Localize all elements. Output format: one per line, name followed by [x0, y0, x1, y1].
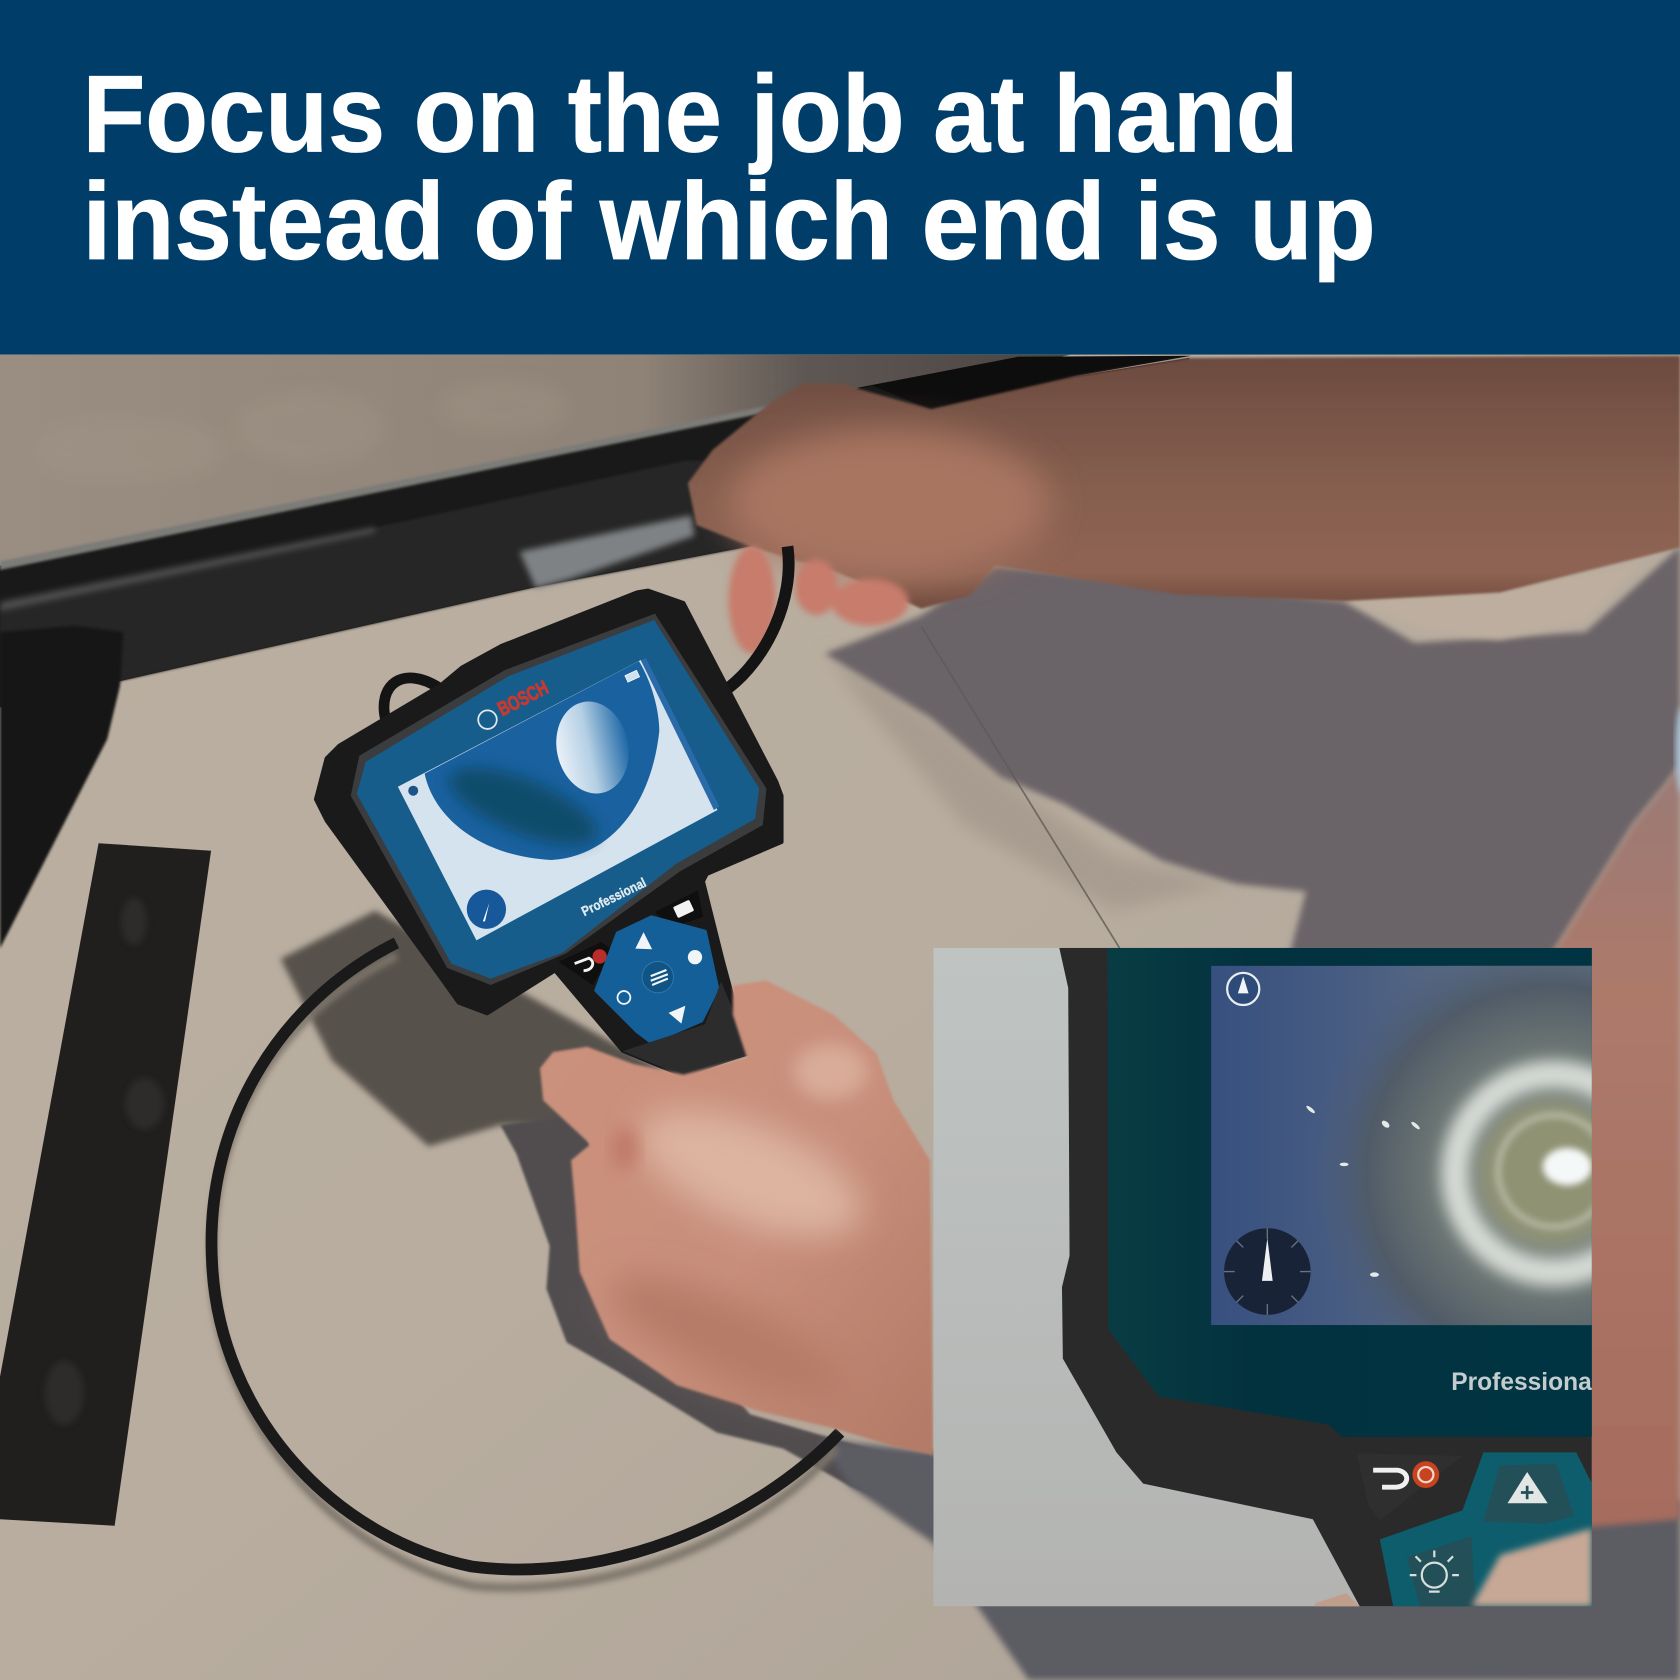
back arrow: [575, 958, 593, 971]
cable shadow: [212, 956, 836, 1588]
main right shadow: [825, 546, 1680, 954]
channel lower face: [0, 461, 750, 707]
battery icon: [625, 670, 640, 682]
right screen band: [641, 658, 719, 810]
dark halo: [1304, 923, 1680, 1423]
lighter wrist of upper arm: [729, 429, 1050, 579]
compass needle: [1262, 1238, 1273, 1281]
thumb in inset: [1471, 1528, 1592, 1606]
white core: [1543, 1148, 1592, 1185]
compass needle: [483, 903, 489, 921]
black ledge above arm: [857, 356, 1191, 411]
zoomed inset: [933, 923, 1680, 1606]
bright button: [688, 950, 702, 964]
olive core: [1480, 1102, 1623, 1245]
lower dark floor shadow: [820, 1439, 1680, 1680]
inset background: [933, 948, 1592, 1606]
finger tip in inset: [1315, 1593, 1360, 1606]
sunlit floor patch: [1468, 629, 1540, 643]
compass ticks: [1224, 1228, 1311, 1315]
black strip: [0, 843, 211, 1526]
dark interior band: [440, 752, 606, 861]
tile seam: [921, 627, 1120, 948]
camera glyph: [673, 900, 694, 918]
title line 2: instead of which end is up: [82, 161, 1376, 283]
inner pale ring: [1498, 1115, 1610, 1227]
up triangle: [1508, 1472, 1548, 1503]
teal keypad: [1380, 1452, 1592, 1606]
photo scene: [0, 355, 1680, 1680]
camera button: [655, 890, 703, 928]
cable in upper hand: [729, 546, 789, 688]
wall lip highlight: [0, 405, 771, 570]
white specks: [1305, 1105, 1421, 1277]
strip scuffs: [45, 898, 164, 1425]
device shadow: [281, 911, 664, 1146]
Professional label: Professional: [1451, 1369, 1599, 1396]
blurred foreground person: [1553, 773, 1680, 1530]
upper arm: [688, 356, 1680, 609]
bright ring: [1455, 1074, 1653, 1272]
floor: [0, 355, 1680, 1680]
device body: [1059, 948, 1592, 1606]
penumbra on floor: [843, 670, 1206, 908]
up button: [635, 932, 652, 949]
tube opening: [425, 661, 659, 860]
hand highlight: [623, 1084, 877, 1262]
hand shadow: [500, 1119, 864, 1492]
moon reflection: [548, 695, 637, 800]
fingers of upper hand: [729, 546, 909, 654]
menu lines: [651, 970, 668, 985]
plus mark: [1521, 1486, 1533, 1499]
BOSCH brand: BOSCH: [494, 677, 552, 721]
bulb icon: [1410, 1551, 1459, 1592]
inset screen: [1211, 923, 1680, 1423]
back and power button: [559, 942, 614, 985]
power icon: [592, 949, 607, 964]
dim button: [617, 991, 630, 1004]
blue keypad: [596, 917, 717, 1042]
title line 1: Focus on the job at hand: [82, 54, 1299, 176]
power mark: [1418, 1467, 1433, 1482]
gripping hand: [540, 980, 933, 1455]
wall mottling: [32, 380, 568, 482]
compass icon small: [408, 786, 418, 796]
title banner: [0, 0, 1680, 355]
small needle: [1238, 976, 1249, 993]
BOSCH logo ring: [478, 710, 497, 729]
upper hand highlight: [794, 1044, 867, 1099]
pale blue blur at edge: [1676, 707, 1680, 793]
body outline ridge: [351, 614, 766, 985]
teal bezel: [1108, 948, 1592, 1437]
black channel: [0, 358, 1189, 707]
small compass icon: [1227, 973, 1259, 1005]
compass dial: [1224, 1228, 1311, 1315]
inspection cable: [211, 943, 840, 1569]
dim button: [1407, 1536, 1476, 1606]
rubber body: [316, 590, 782, 1076]
menu button: [642, 961, 674, 993]
blue bezel: [357, 620, 759, 979]
power icon: [1412, 1461, 1439, 1488]
compass dial: [467, 890, 506, 929]
inspection camera device: [316, 590, 782, 1076]
back and power button: [1357, 1453, 1462, 1520]
back arrow: [1373, 1470, 1407, 1487]
cable loop behind device: [384, 678, 439, 720]
wall surface: [0, 355, 1071, 568]
textured grip: [623, 981, 751, 1076]
knuckle redness: [612, 1127, 638, 1170]
grey handle: [520, 515, 694, 588]
down button: [669, 1006, 685, 1024]
up button: [1483, 1463, 1574, 1524]
channel second lip: [0, 527, 375, 611]
lower hand shade: [596, 1253, 861, 1426]
display screen: [398, 658, 719, 940]
Professional label: Professional: [579, 875, 649, 919]
black panel on the left: [0, 626, 123, 948]
